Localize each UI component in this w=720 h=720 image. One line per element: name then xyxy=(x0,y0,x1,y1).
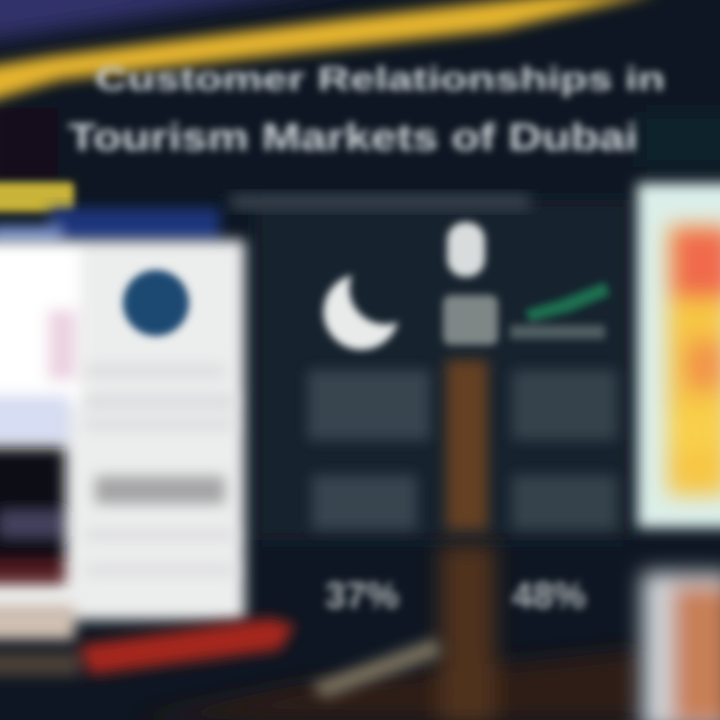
left panel xyxy=(0,208,245,640)
panel colour fill xyxy=(668,225,720,495)
panel header xyxy=(0,208,220,244)
right panel xyxy=(637,183,720,528)
panel frame xyxy=(637,183,720,528)
stat text blocks xyxy=(512,370,617,530)
yellow tag xyxy=(0,182,74,212)
icon: green chart xyxy=(510,282,610,339)
stat column 1 xyxy=(308,275,430,616)
title xyxy=(68,60,665,159)
icon: blue circle xyxy=(123,270,189,336)
stat number: 48% xyxy=(512,575,586,616)
yellow diagonal banner xyxy=(0,0,660,104)
photo inset xyxy=(0,448,75,640)
stat number: 37% xyxy=(325,575,399,616)
stat text blocks xyxy=(308,370,430,530)
red base xyxy=(0,618,295,676)
icon: white figure xyxy=(443,222,498,345)
floor xyxy=(130,545,640,720)
floor highlight xyxy=(310,638,442,698)
panel body xyxy=(0,240,245,620)
title: Tourism Markets of Dubai xyxy=(68,117,638,159)
central column xyxy=(446,360,488,530)
title: Customer Relationships in xyxy=(95,60,665,97)
stat column 2 xyxy=(443,222,617,616)
subtitle strip xyxy=(230,194,530,210)
right panel reflection xyxy=(642,572,720,720)
text block xyxy=(85,365,235,575)
icon: crescent xyxy=(323,275,398,350)
top purple band xyxy=(0,0,380,42)
